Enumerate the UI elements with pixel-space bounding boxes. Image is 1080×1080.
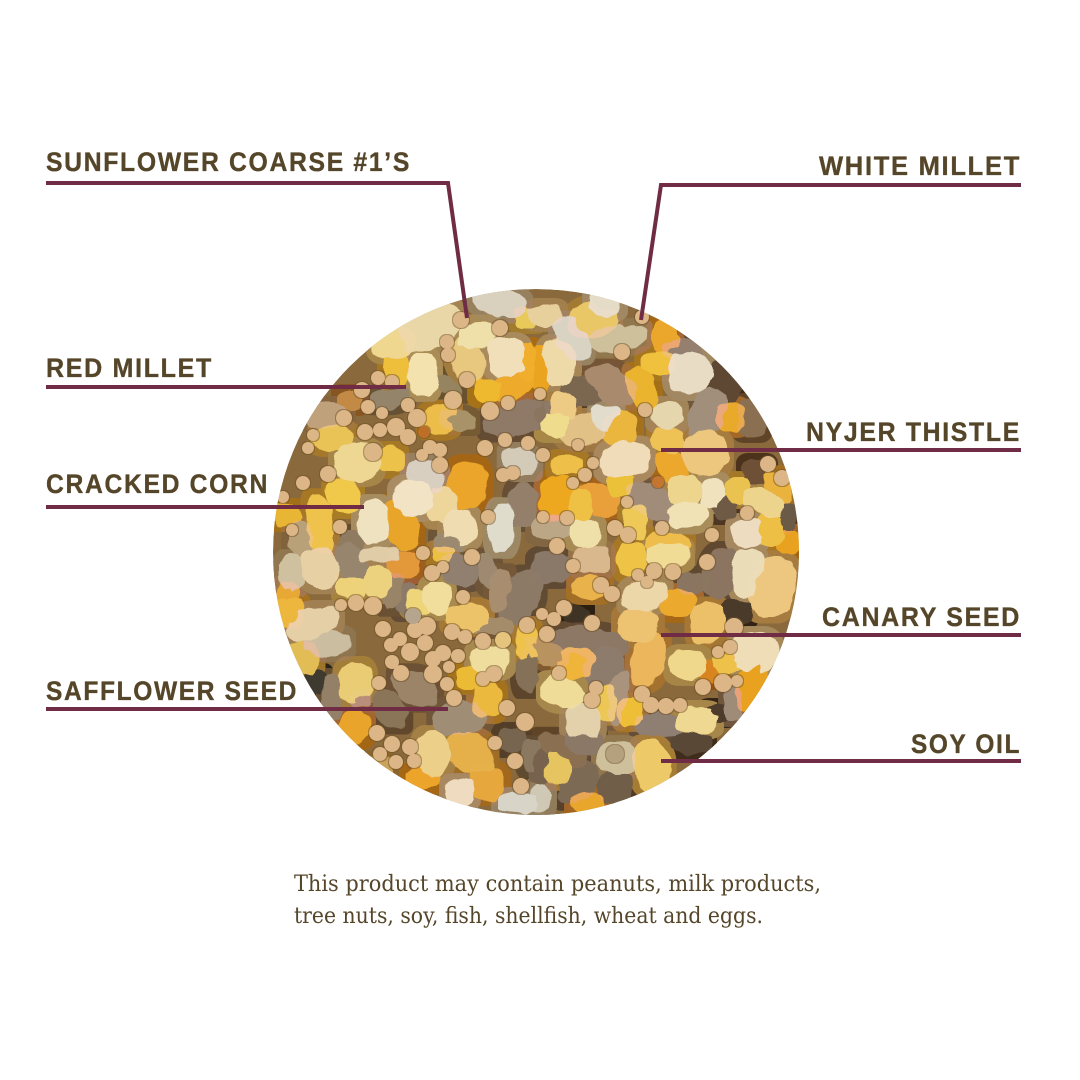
seeds: corn and sunflower pieces, lower left xyxy=(278,542,546,810)
label: Red Millet: RED MILLET xyxy=(46,353,213,383)
seeds: irregular corn and sunflower pieces xyxy=(275,285,799,810)
label: Nyjer Thistle: NYJER THISTLE xyxy=(806,417,1021,447)
label: Cracked Corn: CRACKED CORN xyxy=(46,469,269,499)
label: Sunflower Coarse #1's xyxy=(46,147,467,318)
seed mix circular photo xyxy=(273,285,799,815)
seeds: corn and sunflower pieces, lower right xyxy=(526,545,799,809)
label: Canary Seed: CANARY SEED xyxy=(822,602,1021,632)
label: Soy Oil: SOY OIL xyxy=(911,729,1021,759)
seeds: round millet grains xyxy=(277,310,790,794)
seeds: corn and sunflower pieces, upper right xyxy=(531,293,798,551)
label: White Millet xyxy=(641,151,1021,320)
allergen note xyxy=(294,872,821,929)
allergen note: tree nuts, soy, fish, shellfish, wheat and eggs. xyxy=(294,904,763,929)
label: Sunflower Coarse #1's: SUNFLOWER COARSE #1’S xyxy=(46,147,411,177)
allergen note: This product may contain peanuts, milk products, xyxy=(294,872,821,897)
seeds: corn and sunflower pieces, upper left xyxy=(275,285,557,557)
label: White Millet: WHITE MILLET xyxy=(819,151,1021,181)
label: Safflower Seed: SAFFLOWER SEED xyxy=(46,676,298,706)
